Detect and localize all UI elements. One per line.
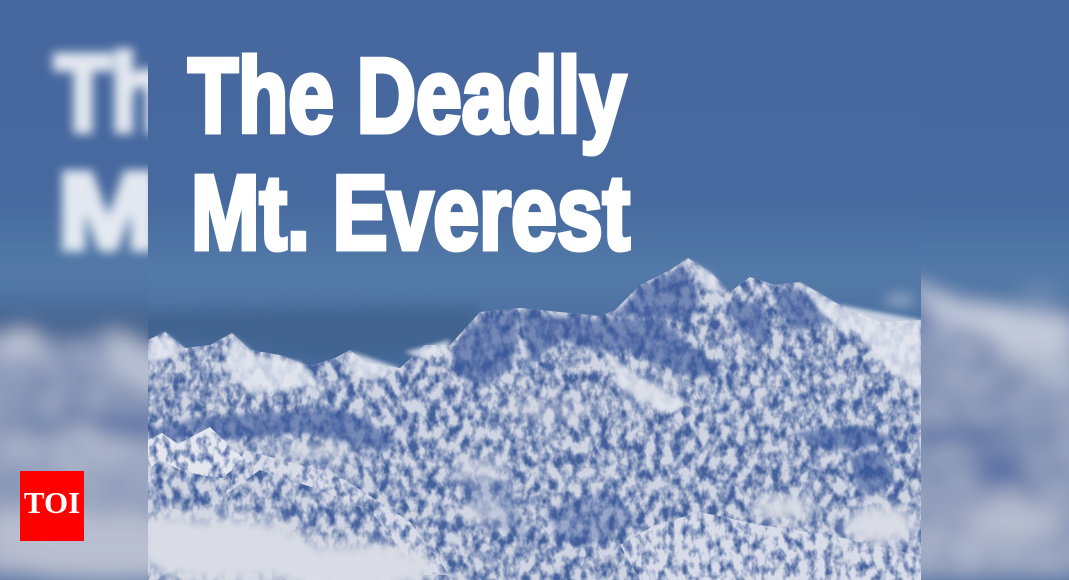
snow fields bbox=[148, 260, 921, 412]
blurred title fragment: Th bbox=[55, 32, 167, 153]
foreground ridge bbox=[148, 427, 921, 580]
blurred title fragment: M bbox=[58, 150, 158, 271]
main mountain range bbox=[100, 258, 970, 580]
title bbox=[188, 37, 630, 272]
clouds bbox=[135, 297, 916, 580]
logo: TOI: TOI bbox=[24, 485, 80, 520]
sky bbox=[0, 229, 1069, 324]
blurred title fragment bbox=[46, 41, 148, 259]
logo: TOI bbox=[20, 471, 84, 541]
dark rock faces bbox=[148, 266, 900, 545]
distant haze bbox=[100, 307, 480, 362]
title line 2: Mt. Everest bbox=[191, 154, 630, 272]
panel: blurred left backdrop bbox=[0, 41, 148, 580]
title line 1: The Deadly bbox=[188, 37, 626, 155]
panel: central mountain photograph bbox=[148, 229, 921, 580]
panel: blurred right backdrop bbox=[247, 226, 1069, 580]
